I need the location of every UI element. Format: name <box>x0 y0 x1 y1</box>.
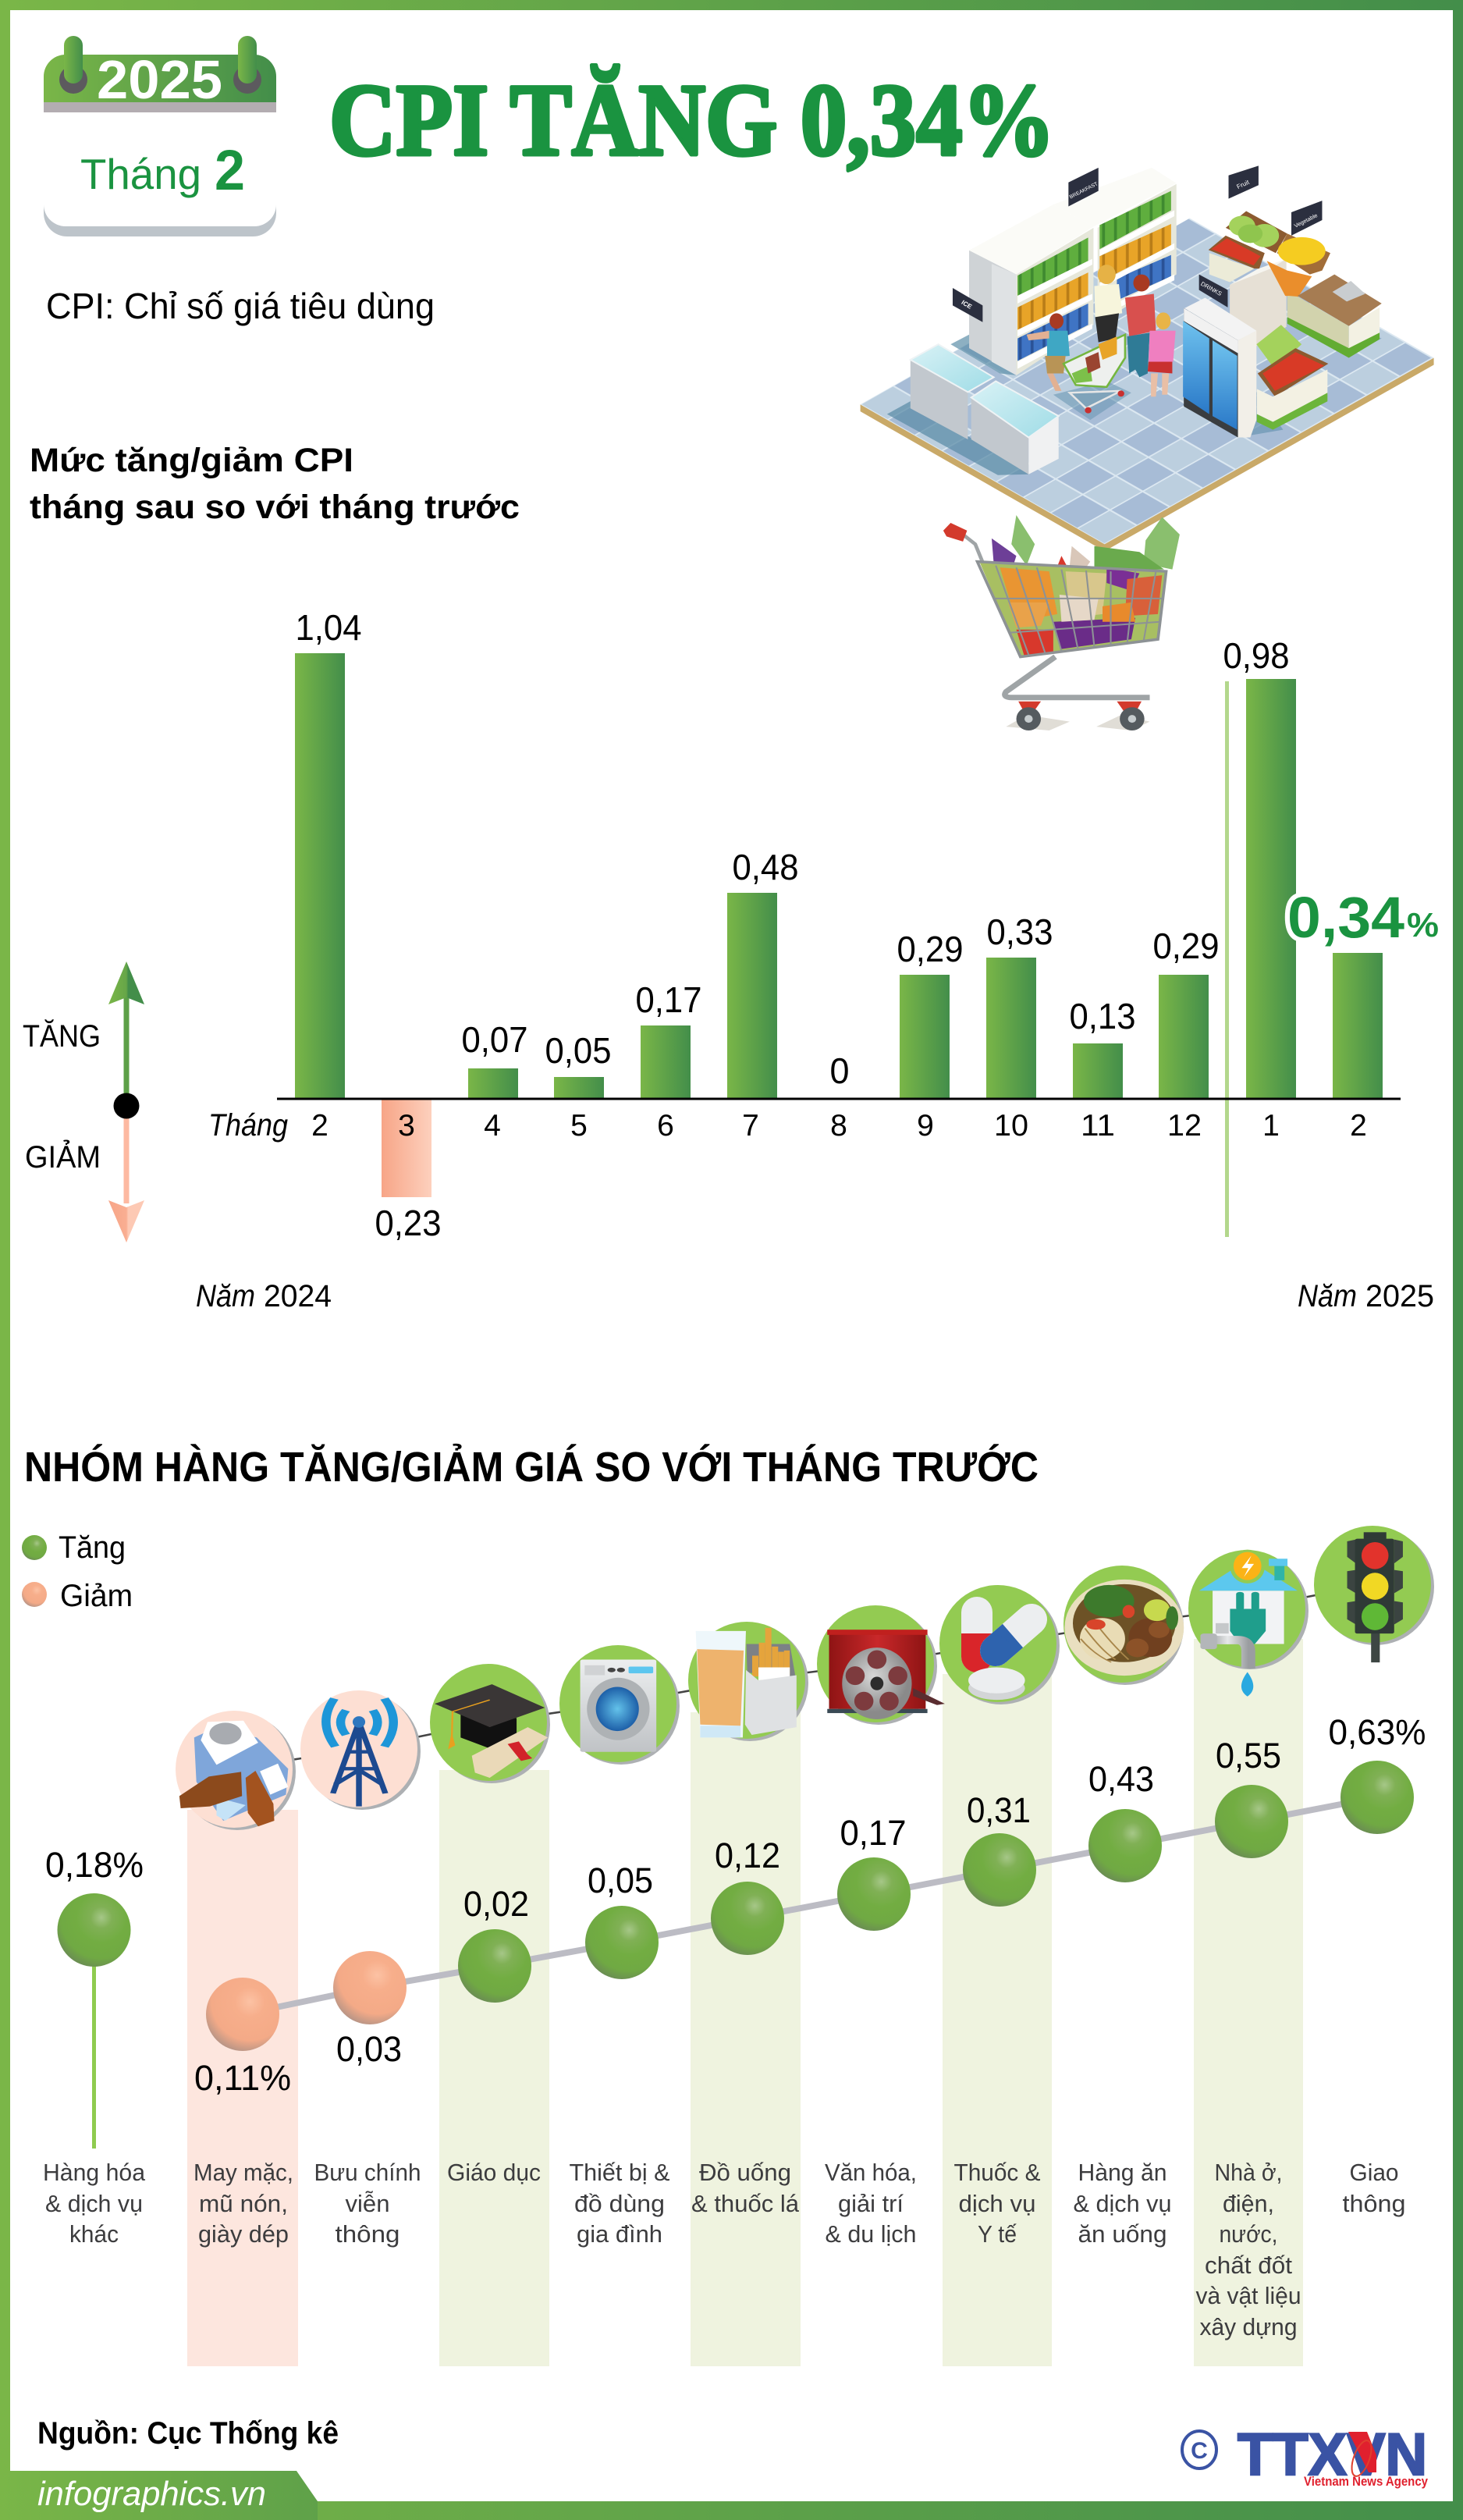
legend: increase and decrease dots: Tăng <box>59 1530 126 1565</box>
point values: 0,43 <box>1088 1759 1154 1799</box>
icon: washing machine <box>559 1645 680 1765</box>
legend arrows: increase / decrease: TĂNG <box>23 1018 101 1054</box>
label: other goods: khác <box>69 2220 119 2248</box>
month axis labels: 4 <box>484 1109 501 1143</box>
label: other goods: & dịch vụ <box>45 2190 143 2217</box>
month axis labels: 6 <box>657 1109 674 1143</box>
label: drinks and tobacco: & thuốc lá <box>691 2190 800 2217</box>
value labels: 0,48 <box>732 847 799 887</box>
value labels: 0 <box>830 1050 849 1091</box>
label: medicine: dịch vụ <box>958 2190 1036 2217</box>
grey connector line <box>243 1797 1377 2014</box>
people and trolley <box>1027 265 1176 414</box>
shelf signs: Fruit <box>1235 179 1251 190</box>
logo: TTXVN Vietnam News Agency: C <box>1191 2438 1208 2464</box>
point values <box>45 1712 1426 2098</box>
label: housing: và vật liệu <box>1195 2282 1301 2309</box>
label: medicine <box>953 2159 1041 2248</box>
label: culture: & du lịch <box>826 2220 916 2248</box>
label: telecom: thông <box>336 2220 399 2248</box>
label: housing: nước, <box>1219 2220 1278 2248</box>
line chart: price change of goods groups <box>45 1712 1426 2149</box>
label: education: Giáo dục <box>447 2159 541 2186</box>
heading: monthly CPI change: Mức tăng/giảm CPI <box>30 442 353 479</box>
column highlight bands <box>187 1639 1303 2366</box>
legend: increase and decrease dots <box>22 1530 133 1613</box>
point values: 0,31 <box>967 1790 1031 1830</box>
bar chart: monthly CPI <box>196 607 1439 1313</box>
month axis labels: 3 <box>398 1109 415 1143</box>
year labels: 2025 <box>1365 1279 1434 1313</box>
value labels: 0,98 <box>1223 635 1289 676</box>
label: transport: thông <box>1342 2190 1406 2217</box>
highlighted value 0,34%: % <box>1407 906 1439 944</box>
produce stalls <box>1209 211 1382 430</box>
legend arrows: increase / decrease: GIẢM <box>25 1139 101 1175</box>
label: household: đồ dùng <box>574 2190 665 2217</box>
label: housing: Nhà ở, <box>1214 2159 1283 2186</box>
label: telecom: Bưu chính <box>314 2159 421 2186</box>
point values: 0,63% <box>1328 1712 1426 1752</box>
footer tab: infographics.vn: infographics.vn <box>37 2475 266 2513</box>
point values: 0,05 <box>588 1861 653 1900</box>
value labels: 0,07 <box>462 1019 527 1060</box>
icon: traffic light <box>1314 1526 1434 1662</box>
axis line <box>277 1097 1401 1100</box>
month axis labels: 5 <box>570 1109 588 1143</box>
freezers <box>911 344 1059 474</box>
month axis labels: 1 <box>1262 1109 1280 1143</box>
icon: bowl of noodles <box>1064 1566 1184 1685</box>
month axis labels: Tháng <box>208 1108 288 1143</box>
icon: calendar 2025 month 2: 2025 <box>97 49 222 110</box>
label: food: & dịch vụ <box>1074 2190 1172 2217</box>
illustration: isometric supermarket <box>861 165 1434 551</box>
value labels: 0,33 <box>986 912 1053 952</box>
icon: medicine capsules <box>939 1585 1060 1704</box>
icon: film reel and curtain <box>817 1605 945 1725</box>
label: housing: điện, <box>1223 2190 1274 2217</box>
point values: 0,02 <box>463 1884 529 1924</box>
year labels: 2024 <box>264 1279 332 1313</box>
section heading: goods groups: NHÓM HÀNG TĂNG/GIẢM GIÁ SO VỚI THÁNG TRƯỚC <box>24 1444 1039 1491</box>
label: culture: giải trí <box>838 2190 904 2217</box>
label: transport: Giao <box>1350 2159 1398 2186</box>
month axis labels: 2 <box>311 1109 328 1143</box>
stem: other goods <box>92 1963 96 2149</box>
label: clothes: giày dép <box>198 2220 289 2248</box>
label: transport <box>1342 2159 1406 2217</box>
points <box>58 1761 1414 2051</box>
label: other goods <box>43 2159 146 2248</box>
icon: calendar 2025 month 2 <box>44 36 276 236</box>
title: CPI TĂNG 0,34% <box>329 62 1055 177</box>
logo: TTXVN Vietnam News Agency: Vietnam News Agency <box>1304 2474 1428 2489</box>
label: telecom: viễn <box>345 2190 390 2217</box>
footer tab: infographics.vn <box>0 2471 318 2520</box>
year labels <box>196 1279 1434 1313</box>
divider: year 2024 / 2025 <box>1225 681 1229 1237</box>
shelf signs: ICE <box>960 299 974 311</box>
icon: drink and cigarettes <box>688 1622 808 1741</box>
value labels: 0,13 <box>1069 996 1136 1036</box>
label: household: gia đình <box>577 2220 662 2248</box>
heading: monthly CPI change <box>30 442 520 526</box>
shelf signs: Vegetable <box>1293 212 1319 229</box>
label: clothes: May mặc, <box>194 2159 293 2186</box>
month axis labels: 9 <box>917 1109 934 1143</box>
category labels <box>43 2159 1406 2341</box>
shelf signs <box>953 165 1322 322</box>
value labels: 0,29 <box>1153 926 1219 966</box>
month axis labels: 7 <box>742 1109 759 1143</box>
label: telecom <box>314 2159 421 2248</box>
label: food: ăn uống <box>1078 2220 1167 2248</box>
label: food: Hàng ăn <box>1078 2159 1167 2186</box>
connector line behind category icons <box>234 1584 1372 1769</box>
year labels: Năm <box>196 1279 255 1313</box>
icon: calendar 2025 month 2: Tháng <box>80 150 201 198</box>
month axis labels: 8 <box>830 1109 847 1143</box>
point values: 0,03 <box>336 2029 402 2069</box>
icon: house, electricity and water <box>1188 1550 1309 1697</box>
value labels: 0,29 <box>897 929 963 969</box>
point values: 0,11% <box>194 2058 291 2098</box>
label: drinks and tobacco: Đồ uống <box>699 2159 791 2186</box>
year labels: Năm <box>1298 1279 1357 1313</box>
shelf left <box>969 204 1093 375</box>
icon: clothes and shoes <box>176 1711 296 1830</box>
point values: 0,12 <box>715 1836 780 1875</box>
label: household: Thiết bị & <box>570 2159 670 2186</box>
label: housing: chất đốt <box>1205 2252 1292 2279</box>
value labels <box>295 607 1289 1243</box>
value labels: 0,05 <box>545 1030 612 1071</box>
legend arrows: increase / decrease <box>23 961 144 1242</box>
month axis labels: 11 <box>1081 1109 1115 1143</box>
label: drinks and tobacco <box>691 2159 800 2217</box>
legend: increase and decrease dots: Giảm <box>60 1579 133 1613</box>
subtitle: CPI definition: CPI: Chỉ số giá tiêu dùng <box>46 286 435 326</box>
point values: 0,17 <box>840 1813 907 1853</box>
label: housing: xây dựng <box>1200 2313 1297 2341</box>
shelf signs: BREAKFAST <box>1069 181 1099 200</box>
shelf signs: DRINKS <box>1199 280 1223 297</box>
icon: telecom tower <box>300 1690 421 1810</box>
heading: monthly CPI change: tháng sau so với tháng trước <box>30 489 520 526</box>
label: clothes: mũ nón, <box>199 2190 288 2217</box>
point values: 0,55 <box>1216 1736 1281 1775</box>
label: other goods: Hàng hóa <box>43 2159 146 2186</box>
label: clothes <box>194 2159 293 2248</box>
shelf right <box>1053 168 1177 325</box>
icon: calendar 2025 month 2: 2 <box>215 139 245 202</box>
fridge and partition <box>1183 259 1287 438</box>
highlighted value 0,34%: 0,34 <box>1287 885 1404 950</box>
logo: TTXVN Vietnam News Agency: TTXVN <box>1238 2422 1427 2488</box>
value labels: 0,17 <box>635 979 702 1020</box>
month axis labels: 2 <box>1350 1109 1367 1143</box>
point values: 0,18% <box>45 1845 144 1885</box>
label: culture <box>825 2159 917 2248</box>
label: medicine: Y tế <box>978 2220 1017 2248</box>
label: culture: Văn hóa, <box>825 2159 917 2186</box>
month axis labels: 12 <box>1167 1109 1202 1143</box>
label: household <box>570 2159 670 2248</box>
month axis labels: 10 <box>994 1109 1028 1143</box>
label: food <box>1074 2159 1172 2248</box>
label: housing <box>1195 2159 1301 2341</box>
source: Nguồn: Cục Thống kê <box>37 2416 339 2451</box>
month axis labels <box>208 1108 1367 1143</box>
value labels: 1,04 <box>295 607 362 648</box>
illustration: shopping cart with vegetables <box>943 515 1180 730</box>
value labels: 0,23 <box>375 1203 442 1243</box>
icon: graduation cap and diploma <box>430 1664 550 1783</box>
label: medicine: Thuốc & <box>953 2159 1041 2186</box>
bars <box>295 653 1383 1197</box>
